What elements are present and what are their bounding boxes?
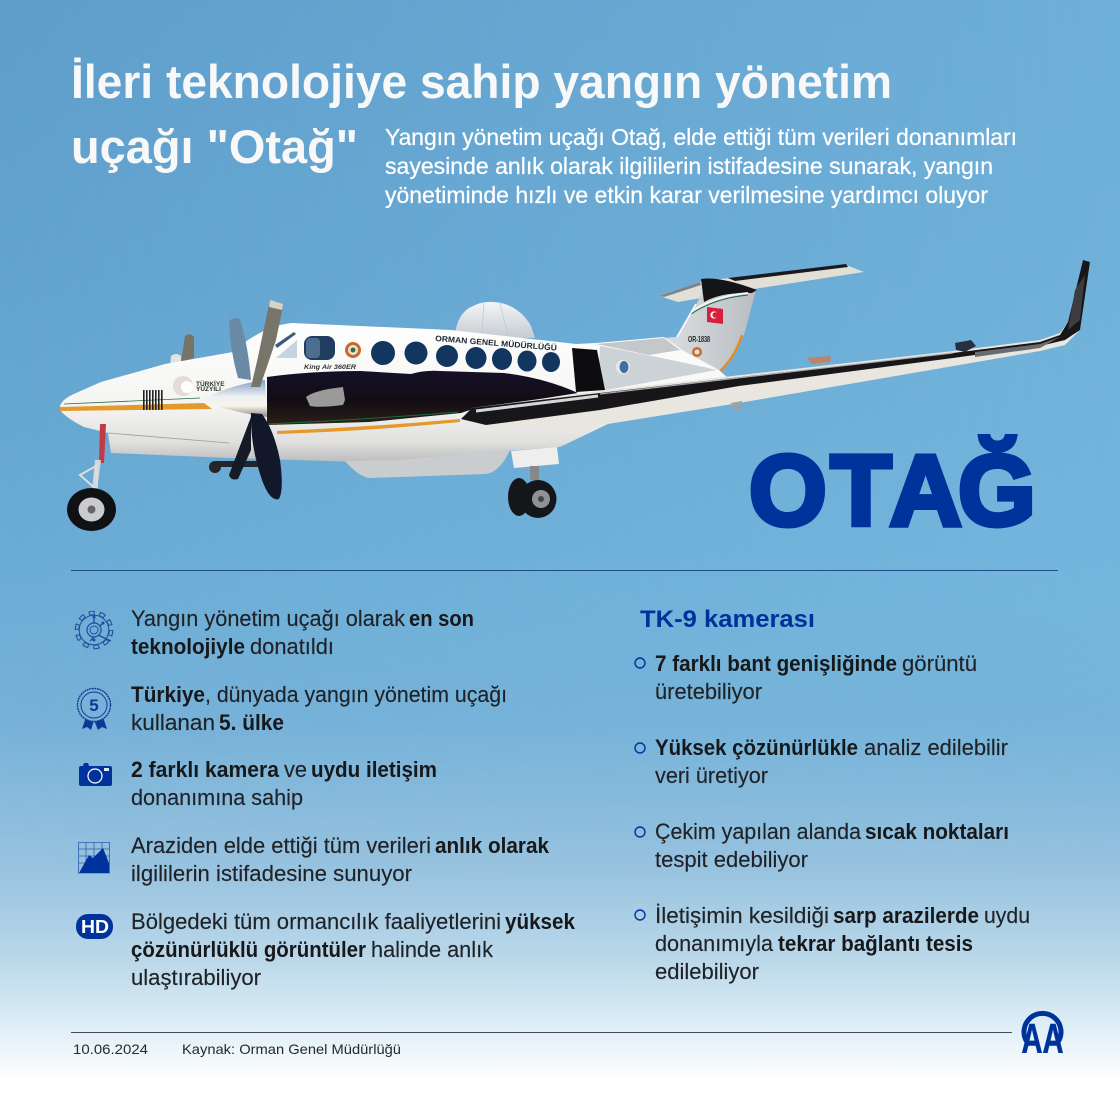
fuselage lettering: ORMAN GENEL MÜDÜRLÜĞÜ — [435, 334, 557, 353]
bullet 4: İletişimin kesildiği — [655, 903, 829, 928]
nose landing gear — [67, 424, 116, 531]
bullet 1: 7 farklı bant genişliğinde — [655, 651, 897, 676]
feature 1 — [131, 606, 474, 659]
subtitle text: yönetiminde hızlı ve etkin karar verilmesine yardımcı oluyor — [385, 182, 988, 208]
propeller hub struts — [216, 461, 258, 467]
bullet 3 — [635, 819, 1009, 872]
panel: TK-9 camera — [635, 606, 1030, 984]
footer date: 10.06.2024 — [73, 1041, 148, 1057]
icon: camera — [79, 763, 112, 786]
bullet 2: veri üretiyor — [655, 763, 768, 788]
feature 5: çözünürlüklü görüntüler — [131, 937, 366, 962]
nose vents — [143, 390, 163, 410]
bullet 2: analiz edilebilir — [864, 735, 1008, 760]
feature 1: Yangın yönetim uçağı olarak — [131, 606, 406, 631]
bullet 1 — [635, 651, 977, 704]
feature 4: Araziden elde ettiği tüm verileri — [131, 833, 431, 858]
bullet 1: üretebiliyor — [655, 679, 762, 704]
anniversary mark — [173, 376, 225, 396]
subtitle text: Yangın yönetim uçağı Otağ, elde ettiği tüm verileri donanımları — [385, 124, 1017, 150]
footer rule — [71, 1032, 1012, 1033]
dome — [455, 302, 535, 338]
bullet 4: uydu — [984, 903, 1030, 928]
main landing gear — [508, 447, 559, 518]
bullet 2 — [635, 735, 1008, 788]
open door — [572, 348, 605, 392]
horizontal stabilizer — [659, 264, 864, 302]
aft window — [616, 360, 630, 374]
bullet 4: sarp arazilerde — [833, 903, 979, 928]
logo on fuselage — [345, 342, 361, 358]
feature 4: anlık olarak — [435, 833, 550, 858]
divider — [71, 570, 1058, 571]
registration: OR-1838 — [688, 335, 710, 344]
product name OTAG: OTAĞ — [749, 435, 1036, 547]
title — [71, 55, 892, 173]
footer source: Kaynak: Orman Genel Müdürlüğü — [182, 1041, 401, 1057]
feature 1: teknolojiyle — [131, 634, 245, 659]
fuselage — [60, 323, 728, 462]
bullet 2: Yüksek çözünürlükle — [655, 735, 858, 760]
AA logo: AA — [1022, 1015, 1064, 1062]
title: İleri teknolojiye sahip yangın yönetim — [71, 55, 892, 108]
feature 2: Türkiye — [131, 682, 205, 707]
propeller back blades — [229, 318, 251, 480]
far propeller — [170, 334, 194, 366]
engine nacelle — [267, 371, 578, 425]
feature 3: donanımına sahip — [131, 785, 303, 810]
title: uçağı "Otağ" — [71, 120, 358, 173]
bullet 4 — [635, 903, 1030, 984]
icon: HD — [76, 914, 113, 939]
bullet 3: sıcak noktaları — [865, 819, 1009, 844]
feature 5: Bölgedeki tüm ormancılık faaliyetlerini — [131, 909, 501, 934]
feature 2: 5. ülke — [219, 710, 284, 735]
feature 5: ulaştırabiliyor — [131, 965, 261, 990]
feature 4 — [131, 833, 550, 886]
aircraft illustration — [60, 260, 1090, 531]
passenger windows — [371, 341, 560, 372]
propeller spinner — [201, 380, 267, 417]
tail fin — [664, 278, 757, 373]
icon: technology gear — [77, 613, 111, 647]
feature 5: halinde anlık — [371, 937, 494, 962]
feature 5: yüksek — [505, 909, 576, 934]
icon: chart — [78, 842, 110, 873]
model lettering: King Air 360ER — [304, 365, 357, 371]
feature 1: en son — [409, 606, 474, 631]
subtitle text: sayesinde anlık olarak ilgililerin istifadesine sunarak, yangın — [385, 153, 993, 179]
nose orange stripe — [60, 398, 212, 411]
propeller front blades — [251, 300, 283, 499]
flag on tail — [707, 307, 723, 324]
feature 2: , dünyada yangın yönetim uçağı — [205, 682, 507, 707]
tail emblem — [692, 347, 702, 357]
wing tip detail — [955, 340, 976, 352]
bullet 4: edilebiliyor — [655, 959, 759, 984]
feature 2: kullanan — [131, 710, 215, 735]
heading: TK-9 kamerası — [640, 606, 815, 633]
bullet 3: tespit edebiliyor — [655, 847, 808, 872]
feature 2 — [131, 682, 507, 735]
engine lower stripe — [277, 419, 460, 434]
cockpit windows — [275, 332, 335, 360]
icon: HD: HD — [81, 917, 109, 937]
anniversary mark: TÜRKİYE — [196, 379, 225, 388]
icon: rank five badge — [78, 688, 110, 730]
feature 3: uydu iletişim — [311, 757, 437, 782]
feature 3: ve — [284, 757, 307, 782]
panel: features list — [76, 606, 576, 990]
bullet 3: Çekim yapılan alanda — [655, 819, 862, 844]
bullet 4: tekrar bağlantı tesis — [778, 931, 973, 956]
main wing — [461, 260, 1090, 430]
feature 1: donatıldı — [250, 634, 334, 659]
feature 5 — [131, 909, 576, 990]
feature 3 — [131, 757, 437, 810]
anniversary mark: YÜZYILI — [196, 384, 221, 393]
subtitle text — [385, 124, 1017, 208]
icon: rank five badge: 5 — [89, 696, 99, 715]
centre landing gear — [209, 461, 221, 473]
feature 3: 2 farklı kamera — [131, 757, 280, 782]
feature 4: ilgililerin istifadesine sunuyor — [131, 861, 412, 886]
bullet 1: görüntü — [902, 651, 977, 676]
bullet 4: donanımıyla — [655, 931, 774, 956]
belly pod — [345, 450, 510, 478]
AA logo — [1022, 1013, 1064, 1062]
